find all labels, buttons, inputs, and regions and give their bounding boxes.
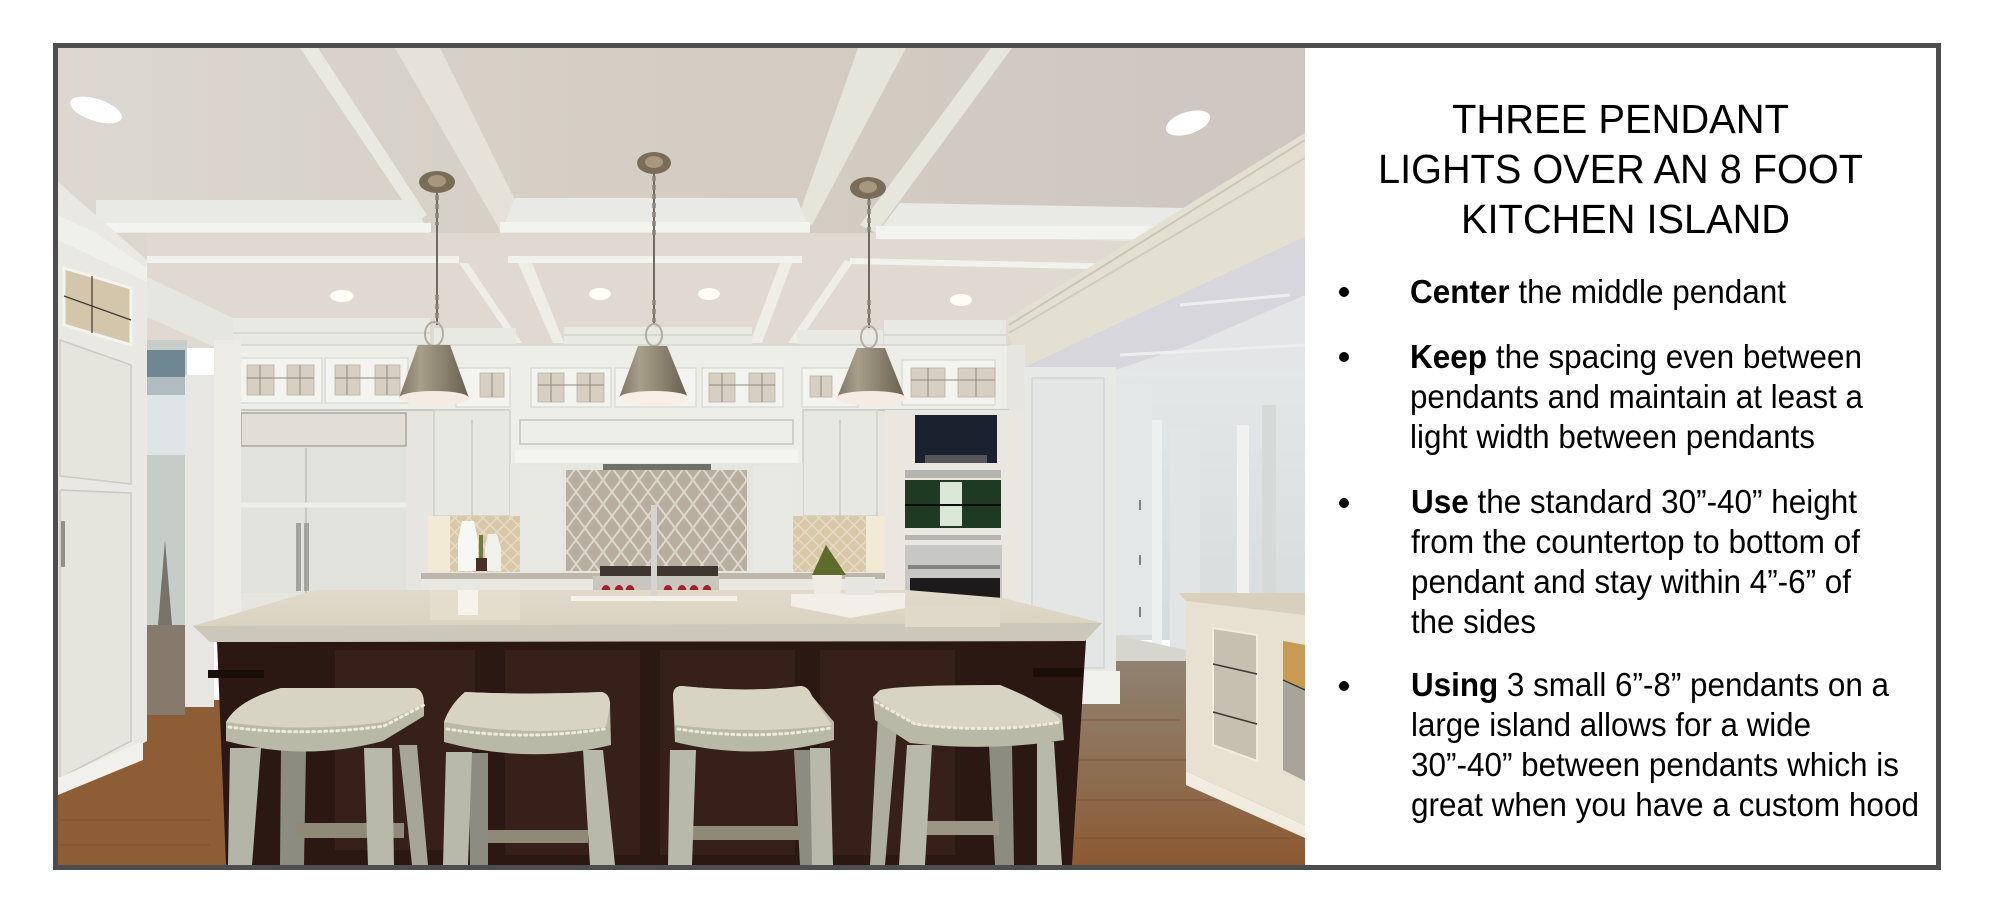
bullet: using: great when you have a custom hood — [1411, 786, 1919, 823]
stool 3 — [668, 686, 834, 865]
backsplash — [428, 470, 888, 572]
ceiling — [58, 48, 1305, 348]
stool 1 — [226, 688, 428, 865]
title: LIGHTS OVER AN 8 FOOT — [1378, 146, 1863, 192]
recessed ceiling lights — [67, 91, 1312, 306]
bullet: keep: Keep the spacing even between — [1410, 338, 1862, 375]
bullet: keep: pendants and maintain at least a — [1410, 378, 1864, 415]
title: THREE PENDANT — [1452, 96, 1789, 142]
beam and adjoining room ceiling — [1008, 133, 1305, 370]
wood floor — [58, 625, 1305, 865]
coffer crown mouldings — [93, 198, 1183, 270]
bullet: using: 30”-40” between pendants which is — [1411, 746, 1899, 783]
bullet: use: pendant and stay within 4”-6” of — [1411, 563, 1852, 600]
bullet: using: Using 3 small 6”-8” pendants on a — [1411, 666, 1890, 703]
bullet: use: Use the standard 30”-40” height — [1411, 483, 1857, 520]
kitchen island base — [208, 640, 1086, 865]
pendant light 1 — [399, 171, 469, 405]
left tall cabinet — [58, 182, 147, 795]
lower upper cabinets and columns — [433, 409, 878, 516]
bullet: using: large island allows for a wide — [1411, 706, 1811, 743]
bullet dots — [1339, 287, 1349, 691]
title: KITCHEN ISLAND — [1461, 196, 1790, 242]
kitchen island countertop — [193, 590, 1102, 642]
bullet: keep — [1410, 338, 1864, 455]
stool 4 — [870, 685, 1064, 865]
vases — [458, 521, 501, 571]
stool 2 — [443, 692, 615, 865]
next room and doors — [1116, 370, 1305, 650]
bullet: center: Center the middle pendant — [1410, 273, 1786, 310]
bullet: use — [1411, 483, 1861, 640]
title — [1378, 96, 1863, 242]
kitchen photo illustration — [58, 48, 1312, 865]
bullet: keep: light width between pendants — [1410, 418, 1815, 455]
pendant light 3 — [836, 177, 906, 405]
glass door cabinets — [239, 358, 995, 407]
faucet and sink — [571, 505, 737, 603]
counter and range — [421, 566, 885, 590]
pendant light 2 — [619, 152, 689, 405]
refrigerator — [241, 413, 406, 593]
plant and tray — [791, 545, 905, 618]
bullet: use: the sides — [1411, 603, 1536, 640]
right side island — [1179, 593, 1305, 838]
pilaster column — [1024, 367, 1120, 704]
panel: text — [1339, 96, 1919, 823]
bullet: using — [1411, 666, 1919, 823]
left doorway and column — [143, 340, 241, 707]
built-in oven stack — [885, 410, 1009, 598]
bullet: use: from the countertop to bottom of — [1411, 523, 1861, 560]
cornice and back wall — [147, 277, 1025, 620]
range hood — [510, 408, 803, 472]
